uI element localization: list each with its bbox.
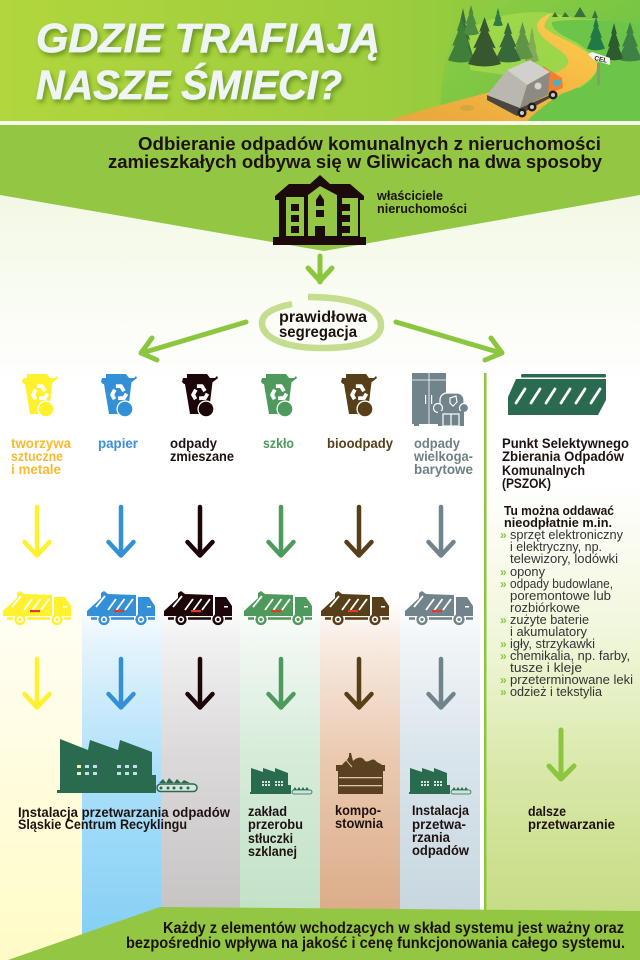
label: recycling installation: Śląskie Centrum Recyklingu: [18, 815, 187, 832]
arrow: owners to segregation: [308, 256, 332, 282]
footer panel: [8, 907, 640, 960]
label: waste processing: Instalacja: [412, 802, 469, 818]
icon: blue bin: [101, 374, 137, 418]
icon: compost crate: [336, 753, 385, 794]
label: mixed waste: zmieszane: [170, 449, 234, 464]
intro text: free drop-off: nieodpłatnie m.in.: [504, 515, 612, 530]
list: accepted items: »: [500, 637, 507, 651]
header banner: [0, 0, 640, 121]
label: bulky waste: odpady: [414, 436, 460, 451]
label: plastics and metals: i metale: [11, 462, 61, 477]
label: recycling installation: Instalacja przetwarzania odpadów: [18, 804, 230, 820]
label: composting plant: stownia: [335, 815, 383, 831]
arrow: blue: [108, 507, 134, 556]
icon: bulky furniture: [412, 373, 468, 426]
icon: waste processing factory: [409, 768, 471, 794]
list: accepted items: odzież i tekstylia: [510, 684, 603, 699]
icon: CEL signpost: [588, 52, 610, 85]
arrow: green: [268, 507, 294, 556]
label: glass plant: szklanej: [248, 843, 297, 859]
label: property owners: właściciele: [376, 189, 443, 203]
label: mixed waste: odpady: [170, 436, 217, 451]
list: accepted items: odpady budowlane,: [510, 576, 613, 591]
list: accepted items: tusze i kleje: [510, 660, 582, 675]
arrow: brown: [346, 507, 372, 556]
panel background: PSZOK: [486, 480, 640, 912]
segregation ring with label: segregacja: [279, 324, 357, 341]
icon: large recycling factory: [57, 739, 197, 793]
label: waste processing: odpadów: [412, 842, 469, 858]
list: accepted items: »: [500, 613, 507, 627]
arrow: yellow: [24, 507, 50, 556]
label: plastics and metals: tworzywa: [11, 436, 71, 451]
arrow: black: [188, 659, 212, 708]
arrow: grey: [428, 507, 454, 556]
subtitle: zamieszkałych odbywa się w Gliwicach na dwa sposoby: [108, 151, 603, 172]
icon: blue truck: [87, 591, 155, 625]
subtitle: [108, 133, 603, 172]
icon: apartment building: [273, 175, 366, 245]
list: accepted items: igły, strzykawki: [510, 636, 595, 651]
icon: black truck: [164, 591, 232, 625]
icon: yellow bin: [22, 374, 58, 418]
label: glass: szkło: [263, 436, 294, 451]
arrows row 2: [24, 659, 454, 708]
label: bulky waste: barytowe: [414, 462, 473, 477]
label: paper: papier: [98, 436, 139, 451]
label: bulky waste: wielkoga-: [413, 449, 473, 464]
label: property owners: nieruchomości: [377, 202, 467, 216]
label: glass plant: stłuczki: [248, 830, 293, 846]
label: glass plant: [248, 803, 303, 859]
arrow: yellow: [24, 659, 50, 708]
arrow: PSZOK further processing: [549, 730, 574, 779]
intro text: free drop-off: [504, 503, 614, 530]
heading: PSZOK: (PSZOK): [502, 476, 551, 491]
list: accepted items: »: [500, 577, 507, 591]
arrow: right branch: [396, 322, 502, 360]
title: GDZIE TRAFIAJĄ: [36, 15, 380, 61]
list: accepted items: »: [500, 528, 507, 542]
trucks row: [3, 591, 473, 625]
arrow: brown: [346, 659, 372, 708]
segregation ring with label: [262, 297, 381, 348]
list: accepted items: sprzęt elektroniczny: [510, 527, 623, 542]
arrow: left branch: [141, 322, 246, 360]
label: waste processing: [412, 802, 469, 858]
column backgrounds: [0, 600, 480, 960]
footer text: [126, 920, 625, 952]
arrow: blue: [108, 659, 134, 708]
list: accepted items: »: [500, 565, 507, 579]
icon: grey truck: [405, 591, 473, 625]
heading: PSZOK: Punkt Selektywnego: [502, 436, 629, 451]
list: accepted items: [500, 527, 633, 699]
label: composting plant: kompo-: [335, 802, 381, 818]
list: accepted items: poremontowe lub: [510, 588, 611, 603]
list: accepted items: »: [500, 685, 507, 699]
arrows row 1: [24, 507, 454, 556]
arrow: black: [188, 507, 212, 556]
label: plastics and metals: sztuczne: [11, 449, 63, 464]
heading: PSZOK: Zbierania Odpadów: [502, 449, 624, 464]
subtitle: Odbieranie odpadów komunalnych z nieruchomości: [138, 133, 601, 154]
label: further processing: [528, 804, 615, 832]
label: glass plant: zakład: [248, 803, 287, 819]
pale background under chevron: [0, 190, 640, 390]
title: [36, 15, 380, 108]
list: accepted items: rozbiórkowe: [510, 600, 580, 615]
waste category labels: [11, 436, 473, 477]
label: waste processing: przetwa-: [412, 816, 466, 832]
icon: yellow truck: [3, 591, 71, 625]
green chevron panel: [0, 125, 640, 251]
heading: PSZOK: Komunalnych: [502, 463, 585, 478]
label: property owners: [376, 189, 467, 216]
list: accepted items: zużyte baterie: [510, 612, 589, 627]
icon: brown bin: [341, 374, 377, 418]
icon: glass factory: [250, 768, 312, 794]
list: accepted items: »: [500, 649, 507, 663]
label: mixed waste: [170, 436, 234, 464]
label: plastics and metals: [11, 436, 71, 477]
heading: PSZOK: [502, 436, 629, 491]
icon: brown truck: [321, 591, 389, 625]
list: accepted items: opony: [510, 564, 545, 579]
divider line: PSZOK: [484, 373, 486, 911]
intro text: free drop-off: Tu można oddawać: [504, 503, 614, 518]
icon: PSZOK container: [508, 374, 606, 415]
bins row: [22, 373, 468, 426]
label: waste processing: rzania: [412, 829, 450, 845]
label: composting plant: [335, 802, 383, 831]
list: accepted items: »: [500, 673, 507, 687]
segregation ring with label: prawidłowa: [279, 309, 367, 326]
icon: garbage truck: [487, 60, 563, 118]
arrow: grey: [428, 659, 454, 708]
label: further processing: dalsze: [528, 804, 566, 819]
list: accepted items: chemikalia, np. farby,: [510, 648, 630, 663]
list: accepted items: i akumulatory: [510, 624, 587, 639]
label: recycling installation: [18, 804, 230, 832]
label: bulky waste: [413, 436, 473, 477]
list: accepted items: przeterminowane leki: [510, 672, 633, 687]
list: accepted items: i elektryczny, np.: [510, 539, 602, 554]
icon: green truck: [244, 591, 312, 625]
label: bio waste: bioodpady: [327, 436, 393, 451]
title: NASZE ŚMIECI?: [36, 62, 342, 108]
icon: green bin: [261, 374, 297, 418]
label: glass plant: przerobu: [248, 816, 303, 832]
list: accepted items: telewizory, lodówki: [510, 551, 618, 566]
arrow: green: [268, 659, 294, 708]
icon: black bin: [182, 374, 218, 418]
illustration: road, trees and garbage truck: [388, 0, 640, 121]
label: further processing: przetwarzanie: [528, 817, 615, 832]
icon: CEL signpost: CEL: [594, 55, 608, 65]
white strip below header: [0, 121, 640, 125]
